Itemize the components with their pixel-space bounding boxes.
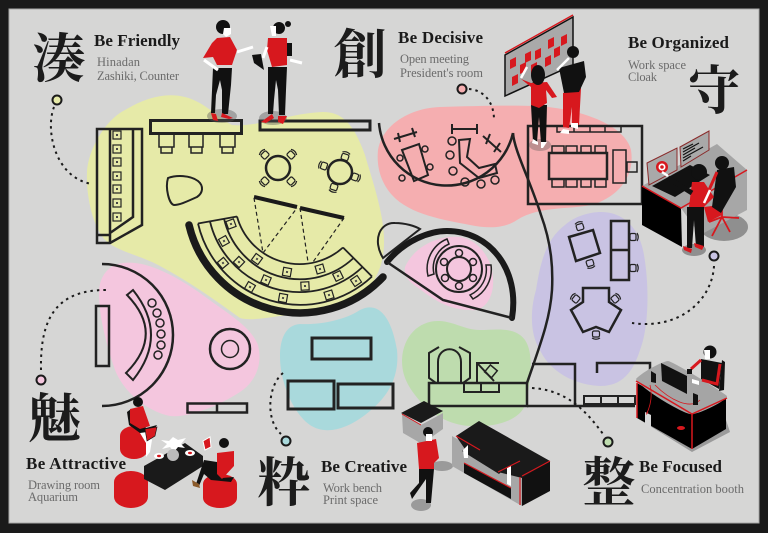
list: friendly spaces: Zashiki, Counter — [97, 69, 180, 83]
list: creative spaces: Work bench — [323, 481, 383, 495]
connector: lavender — [632, 252, 718, 324]
plan: aquarium — [210, 329, 250, 369]
list: decisive spaces — [400, 52, 483, 80]
block: Be Focused — [582, 441, 745, 517]
kanji: sou: 創 — [334, 13, 386, 89]
plan: main curved wall — [513, 133, 552, 383]
heading: Be Creative: Be Creative — [321, 457, 407, 476]
zone: lavender blob — [532, 212, 647, 386]
plan: organic table — [167, 176, 202, 205]
list: friendly spaces — [97, 55, 180, 83]
kanji: miryoku: 魅 — [28, 377, 82, 453]
plan: work space desks — [569, 221, 638, 339]
connector: green — [532, 388, 612, 446]
kanji: iki: 粋 — [258, 441, 310, 517]
connector: yellow — [51, 96, 92, 184]
list: decisive spaces: Open meeting — [400, 52, 470, 66]
list: organized spaces: Cloak — [628, 70, 658, 84]
connector: pink — [36, 290, 106, 384]
illustration: lounge with two people — [114, 397, 237, 508]
zone: green blob — [402, 321, 531, 426]
list: creative spaces — [323, 481, 383, 507]
illustration: pin board with two people — [505, 15, 586, 151]
heading: Be Attractive: Be Attractive — [26, 454, 126, 473]
list: attractive spaces: Drawing room — [28, 478, 100, 492]
plan: hinadan zashiki seating — [97, 129, 142, 243]
plan: work benches — [288, 338, 393, 409]
zone: yellow blob — [87, 95, 384, 319]
plan: round meeting table — [378, 223, 513, 318]
kanji: mamoru: 守 — [688, 49, 740, 125]
illustration: printers with a walking person — [401, 401, 550, 511]
list: organized spaces — [628, 58, 686, 84]
list: organized spaces: Work space — [628, 58, 686, 72]
kanji: minato: 湊 — [32, 17, 86, 93]
kanji: sei: 整 — [582, 441, 636, 517]
zone: cyan blob — [280, 307, 397, 430]
illustration: focused person at desk — [636, 346, 730, 452]
connector: salmon — [458, 84, 494, 120]
plan: partitions with sight lines — [254, 197, 344, 262]
connector: cyan — [270, 373, 290, 446]
plan: president's room — [528, 126, 642, 204]
heading: Be Focused: Be Focused — [639, 457, 723, 476]
heading: Be Organized: Be Organized — [628, 33, 730, 52]
plan: low cabinet — [188, 404, 247, 412]
zone: pink blob — [99, 263, 259, 416]
list: friendly spaces: Hinadan — [97, 55, 141, 69]
list: attractive spaces — [28, 478, 100, 504]
list: creative spaces: Print space — [323, 493, 378, 507]
illustration: workstation with two people — [642, 131, 748, 256]
plan: counter with stools — [150, 120, 242, 153]
plan: long counter — [260, 121, 370, 130]
heading: Be Decisive: Be Decisive — [398, 28, 483, 47]
plan: print space and booths — [429, 347, 650, 406]
block: Be Friendly — [32, 17, 180, 93]
zone: salmon blob — [378, 106, 632, 227]
block: Be Attractive — [26, 377, 126, 504]
block: Be Decisive — [334, 13, 483, 89]
plan: tiered arc seating — [189, 216, 383, 313]
plan: open meeting — [379, 123, 513, 188]
block: Be Organized — [628, 33, 740, 125]
block: Be Creative — [258, 441, 407, 517]
heading: Be Friendly: Be Friendly — [94, 31, 180, 50]
plan: drawing room — [96, 264, 173, 406]
list: attractive spaces: Aquarium — [28, 490, 78, 504]
plan: round tables — [258, 148, 361, 193]
list: focused spaces: Concentration booth — [641, 482, 745, 496]
list: decisive spaces: President's room — [400, 66, 483, 80]
illustration: two standing people — [203, 20, 302, 125]
zone: small pink blob — [405, 237, 493, 310]
